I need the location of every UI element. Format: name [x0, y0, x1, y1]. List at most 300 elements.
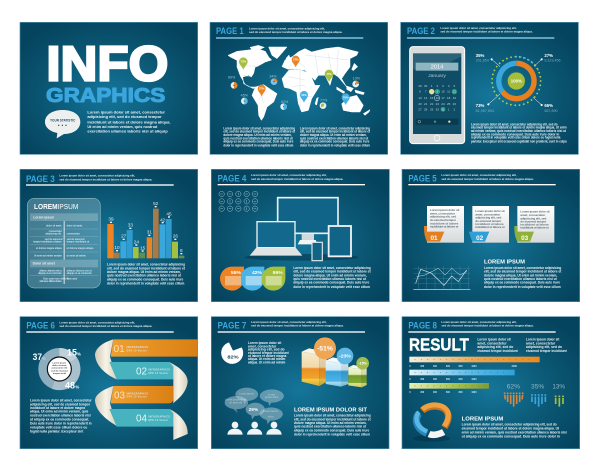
text block: [294, 414, 371, 436]
bar chart: 8: [180, 248, 183, 253]
donut chart: dolor sit amet: [52, 364, 67, 367]
table card: et dolore magna aliqua: [36, 247, 62, 250]
text column 1: amet, consectetur: [477, 341, 507, 345]
table card: aliquip ex ea commodo: [67, 273, 92, 275]
speech bubbles: Lorem: [268, 394, 275, 396]
card 01: [424, 206, 464, 243]
header text: Lorem ipsum dolor sit amet, consectetur adipisicing elit,: [440, 26, 517, 30]
donut chart: Lorem ipsum: [53, 362, 66, 364]
bar: orange: 600: [446, 366, 451, 368]
text block: incididunt ut labore et dolore magna: [30, 406, 85, 410]
table card: et dolore magna aliqua: [67, 247, 94, 250]
phone with calendar: 30: [436, 107, 439, 111]
card 01: 01: [430, 235, 438, 242]
header text: [59, 174, 152, 181]
header text: Lorem ipsum dolor sit amet, consectetur adipisicing elit,: [249, 26, 325, 30]
text block: ut aliquip ex ea commodo consequat. Duis aute irure dolor in: [462, 434, 560, 438]
callout labels: 81,967,854: [476, 109, 494, 113]
card 03: incididunt ut labore: [520, 223, 549, 227]
text block: elit, sed do eiusmod tempor incididunt ut labore et: [294, 417, 371, 421]
text block: [248, 341, 289, 364]
donut chart 100%: [492, 57, 541, 105]
card 02: 02: [476, 235, 484, 242]
donut percentage labels: 13%: [353, 77, 361, 81]
speech bubbles: dolor: [268, 416, 274, 418]
card 02: amet, consectetur: [475, 212, 501, 216]
text column 1: eiusmod tempor incididunt: [477, 349, 518, 353]
text block: aliquip ex ea commodo consequat. Duis aute irure: [484, 281, 560, 285]
people pictogram: blue: [531, 394, 546, 407]
bar: orange: [409, 357, 540, 368]
text block: [471, 122, 567, 143]
text block: aliquip ex ea commodo consequat. Duis aute irure: [294, 428, 369, 432]
phone with calendar: 15: [430, 96, 434, 100]
card 01: do eiusmod tempor: [430, 218, 457, 222]
icon grid: [219, 191, 258, 211]
line chart: [413, 266, 470, 289]
text column right: elit, sed do eiusmod tempor incididunt ut labore et: [300, 130, 371, 134]
speech bubbles: Lorem ipsum: [263, 411, 278, 413]
device: tablet: [329, 226, 351, 256]
phone with calendar: 17: [441, 96, 445, 100]
card 02: incididunt ut labore: [475, 222, 504, 226]
donut chart: [43, 352, 76, 386]
device: laptop: [250, 222, 302, 256]
callout labels: 73%: [476, 103, 484, 108]
phone with calendar: 1: [448, 107, 450, 111]
header text: [59, 320, 152, 328]
bar chart: 52: [153, 201, 159, 206]
donut percentage labels: 62%: [281, 100, 289, 104]
callout labels: 201,854: [476, 59, 489, 63]
text column left: [223, 126, 296, 147]
bar: blue: [409, 370, 515, 381]
text column 2: amet, consectetur: [526, 341, 556, 345]
bar: green: [409, 383, 489, 394]
ribbon 01: EPS 10 Vector: [127, 349, 147, 352]
text column right: Lorem ipsum dolor sit amet, consectetur adipisicing: [300, 126, 370, 130]
text block: aliquip ex ea commodo consequat. Duis aute irure: [107, 277, 183, 281]
speech bubbles: sit amet elit: [229, 402, 242, 405]
text block: [462, 423, 567, 438]
table card: sed do eiusmod: [67, 239, 85, 241]
header text: sed do eiusmod tempor incididunt ut labore et dolore magna aliqua.: [251, 324, 344, 328]
text block: adipisicing elit, sed do: [248, 348, 285, 352]
donut labels: 48: [65, 381, 75, 391]
map pins: 37%: [259, 87, 265, 91]
donut chart: sed do eiusmod: [51, 370, 68, 372]
phone with calendar: 2: [453, 107, 455, 111]
table card: consectetur: [49, 230, 62, 233]
phone with calendar: 7: [425, 90, 427, 94]
heading: page 8: PAGE 8: [408, 320, 437, 330]
phone with calendar: 5: [453, 84, 455, 88]
text block: Lorem ipsum dolor sit amet, consectetur adipisicing: [107, 263, 185, 267]
bar: blue: 1000: [471, 379, 477, 381]
text block: dolore magna aliqua. Ut enim ad minim veniam,: [294, 421, 367, 425]
table card: Duis aute: [67, 277, 78, 280]
map borders: [237, 50, 348, 110]
card 02: incididunt ut labore et: [475, 225, 505, 229]
text column 2: [526, 338, 567, 353]
table card: sed do eiusmod: [45, 239, 63, 241]
table card: Duis aute irure dolor in: [43, 277, 69, 280]
text column right: quis nostrud exercitation ullamco laboris nisi ut: [300, 136, 369, 140]
map pins: 75%: [343, 95, 349, 99]
card 01: amet, consectetur: [430, 211, 456, 215]
header text: [441, 173, 534, 181]
people icons: [227, 422, 282, 435]
text block: voluptate velit esse cillum dolore eu: [30, 425, 87, 429]
callout labels: [476, 53, 561, 113]
ribbon 04: EPS 10 Vector: [148, 419, 168, 422]
card 03: incididunt ut labore et: [520, 226, 549, 230]
header text: Lorem ipsum dolor sit amet, consectetur adipisicing elit,: [441, 173, 517, 177]
phone with calendar: 27: [418, 107, 422, 111]
text block: Lorem ipsum dolor sit amet, consectetur adipisicing: [484, 266, 561, 270]
bar chart: 15: [140, 245, 146, 250]
cover text block: adipisicing elit, sed do eiusmod tempor: [87, 115, 162, 119]
table card: Ut enim ad minim veniam: [34, 255, 62, 258]
phone with calendar: 8: [431, 90, 433, 94]
donut labels: %: [42, 356, 46, 361]
panel: page 1 world map: [210, 22, 388, 154]
phone with calendar: [410, 47, 465, 144]
card 03: [514, 206, 554, 243]
text block: aliqua. Ut enim ad minim: [248, 360, 285, 364]
phone with calendar: 11: [447, 90, 451, 94]
text column 1: Lorem ipsum dolor sit: [477, 338, 511, 342]
bar chart: 26: [173, 233, 178, 238]
text block: amet, consectetur: [248, 344, 277, 348]
ribbon 02: EPS 10 Vector: [148, 372, 168, 375]
table card: dolor sit amet,: [46, 225, 62, 228]
percentages: 13%: [552, 384, 565, 391]
phone with calendar: 9: [436, 90, 438, 94]
text block: elit, sed do eiusmod tempor incididunt ut labore et: [293, 270, 371, 274]
title: INFO: INFO: [46, 36, 168, 91]
title: RESULT: RESULT: [409, 335, 469, 355]
text column left: dolor in reprehenderit in voluptate velit esse cillum: [223, 143, 293, 147]
bar: blue: 0: [409, 379, 411, 381]
text block: dolor in reprehenderit in voluptate velit esse cillum: [293, 285, 370, 289]
subtitle: GRAPHICS: GRAPHICS: [46, 85, 165, 107]
table card: [27, 198, 100, 288]
text block: dolore magna aliqua. Ut enim ad minim veniam,: [484, 273, 557, 277]
card 03: Lorem ipsum dolor sit: [520, 210, 550, 214]
bar chart: 45: [166, 211, 172, 216]
text block: Lorem ipsum dolor sit amet, consectetur adipisicing elit, sed do: [471, 122, 558, 126]
ribbon 03: INFOGRAPHICS: [127, 392, 148, 395]
text block: eiusmod tempor incididunt ut labore et dolore magna aliqua. Ut enim: [471, 126, 567, 130]
text block: enim ad minim veniam, quis nostrud exercitation ullamco laboris nisi: [462, 430, 567, 434]
text column right: dolore magna aliqua. Ut enim ad minim veniam,: [300, 133, 367, 137]
header text: sed do eiusmod tempor incididunt ut labore et dolore magna aliqua.: [251, 177, 343, 181]
ribbon 02: [109, 362, 188, 403]
map pins: [239, 56, 350, 105]
panel: cover: [20, 22, 198, 154]
percentages: [507, 384, 565, 391]
header text: [249, 26, 342, 34]
text block: elit, sed do eiusmod tempor incididunt ut labore et: [107, 266, 186, 270]
bar: orange: 400: [433, 365, 438, 368]
percentage drops: [220, 267, 285, 291]
donut percentage labels: 69%: [228, 76, 236, 80]
donut chart: consectetur elit: [51, 367, 68, 370]
text block: aliqua. Ut enim ad minim veniam, quis: [30, 410, 88, 414]
cover text block: incididunt ut labore et dolore magna aliqua.: [87, 120, 171, 124]
speech bubbles: ipsum dolor: [265, 397, 278, 399]
bar: green: 1000: [471, 392, 477, 394]
text block: Lorem ipsum dolor sit: [248, 341, 282, 345]
text column 2: Lorem ipsum dolor sit: [526, 338, 560, 342]
phone with calendar: 1: [431, 84, 433, 88]
map pins: 73%: [241, 60, 247, 64]
text block: ut labore et dolore magna: [248, 354, 286, 358]
table card: ut enim ad minim: [67, 255, 86, 258]
percentages: 62%: [507, 384, 520, 391]
text block: fugiat nulla pariatur. Excepteur sint: [30, 429, 84, 433]
bar chart: 24: [134, 239, 139, 244]
phone with calendar: 22: [430, 102, 434, 106]
percentage drops: 55%: [273, 270, 283, 276]
phone with calendar: 10: [441, 90, 445, 94]
text block: dolore magna aliqua. Ut enim ad minim veniam,: [107, 270, 181, 274]
percentage circles: -15%: [358, 362, 368, 366]
donut chart: tempor incid: [53, 372, 66, 375]
heading: page 3: PAGE 3: [26, 174, 55, 184]
map pins: 52%: [301, 93, 307, 97]
phone with calendar: 26: [453, 102, 456, 106]
header text: sed do eiusmod tempor incididunt ut labore et dolore magna aliqua.: [441, 324, 534, 328]
table card: LOREMIPSUM: [34, 202, 78, 211]
device: phone: [312, 242, 322, 261]
world map: [228, 45, 370, 120]
text block: [293, 266, 371, 289]
device: monitor: [278, 198, 338, 244]
phone with calendar: 29: [418, 84, 422, 88]
bar chart: 10: [114, 245, 120, 250]
cover text block: Ut enim ad minim veniam, quis nostrud: [87, 125, 157, 129]
bar: blue: 200: [420, 379, 425, 381]
text column left: dolore magna aliqua. Ut enim ad minim veniam,: [223, 133, 292, 137]
phone with calendar: 2: [436, 84, 438, 88]
heading: lorem ipsum: LOREM IPSUM: [462, 416, 504, 422]
heading: page 5: PAGE 5: [408, 173, 437, 183]
percentage circles: -23%: [339, 354, 351, 360]
ribbon 02: INFOGRAPHICS: [148, 369, 170, 372]
table card: Lorem Ipsum: [33, 215, 54, 219]
panel: page 6 donut and ribbons: [20, 317, 198, 449]
phone with calendar: 20: [418, 102, 422, 106]
bar: green: 800: [459, 392, 463, 394]
card 02: [469, 206, 509, 243]
phone with calendar: 31: [441, 107, 445, 111]
text block: dolor in reprehenderit in voluptate velit esse cillum: [107, 281, 184, 285]
bar: orange: 2000: [512, 366, 518, 368]
bar: green: 400: [433, 391, 438, 394]
phone with calendar: 28: [424, 107, 428, 111]
bar: green: 200: [420, 392, 425, 394]
phone with calendar: 6: [419, 90, 421, 94]
ribbon 01: 01: [114, 344, 125, 355]
phone with calendar: 24: [441, 102, 445, 106]
3d box: blue: [326, 357, 348, 387]
heading: page 1: PAGE 1: [216, 26, 244, 36]
text block: Duis aute irure dolor in reprehenderit in: [30, 421, 92, 425]
header text: sed do eiusmod tempor incididunt ut labore et dolore magna aliqua.: [440, 30, 533, 34]
table card: consectetur: [67, 233, 80, 236]
text block: nostrud exercitation ullamco laboris nisi: [30, 413, 91, 417]
text block: elit, sed do eiusmod tempor incididunt ut labore et: [484, 270, 562, 274]
header text: Lorem ipsum dolor sit amet, consectetur adipisicing elit,: [59, 174, 135, 178]
card 02: adipisicing elit, sed: [475, 216, 502, 220]
panel: page 7 boxes and speech bubbles: [211, 317, 389, 449]
text block: dolore magna aliqua. Ut enim ad minim veniam,: [293, 273, 367, 277]
phone with calendar: 30: [424, 84, 428, 88]
text block: ad minim veniam, quis nostrud exercitation ullamco laboris nisi ut: [471, 129, 567, 133]
bar chart: 27: [121, 234, 127, 239]
text column left: elit, sed do eiusmod tempor incididunt ut labore et: [223, 130, 296, 134]
header text: Lorem ipsum dolor sit amet, consectetur adipisicing elit,: [441, 320, 517, 324]
text column left: Lorem ipsum dolor sit amet, consectetur adipisicing: [223, 126, 295, 130]
pie 82%: [221, 342, 243, 364]
map pins: 27%: [293, 58, 299, 62]
table card: ullamco laboris nisi ut: [39, 269, 62, 272]
callout leaders: [487, 58, 542, 106]
donut percentage labels: 77%: [320, 98, 328, 102]
text block: quis nostrud exercitation ullamco laboris nisi ut: [484, 277, 557, 281]
ribbon 04: [109, 409, 188, 440]
phone with calendar: 4: [448, 84, 450, 88]
text column right: [300, 126, 371, 147]
text block: adipisicing elit, sed do eiusmod tempor: [30, 402, 91, 406]
text block: [107, 263, 186, 285]
donut chart 100%: 100%: [511, 79, 522, 84]
cover text block: exercitation ullamco laboris nisi ut aliquip: [87, 130, 168, 134]
donut labels: %: [75, 385, 79, 390]
phone with calendar: 19: [453, 96, 456, 100]
table card: aliquip ex ea commodo: [38, 273, 62, 275]
bar chart: 42: [160, 217, 166, 222]
header text: [251, 320, 344, 328]
text block: [484, 266, 562, 289]
bar: green: 600: [446, 392, 451, 394]
table card: adipiscing elit,: [45, 233, 62, 236]
bar chart: 33: [128, 223, 133, 228]
text block: quis nostrud exercitation ullamco laboris nisi ut: [107, 274, 182, 278]
table card: dolor sit amet,: [67, 225, 83, 228]
panel: page 5 cards and line chart: [402, 169, 580, 302]
shadow under devices: [245, 254, 358, 261]
text block: aliquip ex ea commodo consequat. Duis aute irure dolor in: [471, 132, 559, 136]
bar: orange: 1000: [471, 366, 477, 368]
heading: page 6: PAGE 6: [26, 320, 55, 330]
text column left: quis nostrud exercitation ullamco laboris nisi ut: [223, 136, 293, 140]
header text: sed do eiusmod tempor incididunt ut labore et dolore magna aliqua.: [249, 30, 342, 34]
speech bubble badge: [45, 110, 80, 138]
card 01: adipisicing elit, sed: [430, 215, 456, 219]
cover text block: [87, 111, 171, 134]
text block: Lorem ipsum dolor sit amet, consectetur adipisicing elit, sed do: [462, 423, 557, 427]
header text: sed do eiusmod tempor incididunt ut labore et dolore magna aliqua.: [59, 177, 152, 181]
phone with calendar: 2014: [431, 65, 443, 71]
phone with calendar: 23: [436, 102, 439, 106]
phone with calendar: 14: [424, 96, 428, 100]
text block: Lorem ipsum dolor sit amet, consectetur: [30, 399, 92, 403]
heading: lorem ipsum: LOREM IPSUM: [484, 260, 525, 266]
donut labels: 15: [67, 347, 77, 357]
phone with calendar: 21: [424, 102, 428, 106]
text block: dolor in reprehenderit in voluptate velit esse cillum: [484, 285, 561, 289]
text block: reprehenderit in voluptate velit esse cillum dolore eu fugiat nulla: [471, 136, 560, 140]
phone with calendar: 3: [442, 84, 444, 88]
table card: velit esse cillum dolore: [39, 280, 62, 283]
panel: page 4 devices: [211, 169, 389, 302]
header text: sed do eiusmod tempor incididunt ut labore et dolore magna aliqua.: [59, 324, 152, 328]
text block: aliquip ex ea commodo consequat. Duis aute irure: [293, 281, 369, 285]
phone with calendar: 13: [418, 96, 422, 100]
header text: Lorem ipsum dolor sit amet, consectetur adipisicing elit,: [59, 320, 135, 324]
header text: Lorem ipsum dolor sit amet, consectetur adipisicing elit,: [251, 173, 327, 177]
phone with calendar: January: [428, 73, 446, 79]
phone with calendar: 29: [430, 107, 434, 111]
text column right: dolor in reprehenderit in voluptate velit esse cillum: [300, 143, 370, 147]
phone with calendar: 16: [436, 96, 439, 100]
text block: pariatur. Excepteur sint occaecat cupidatat non proident, sunt in culpa: [471, 139, 567, 143]
card 02: Lorem ipsum dolor sit: [475, 209, 505, 213]
percentages: 35%: [531, 384, 544, 391]
text block: quis nostrud exercitation ullamco laboris nisi ut: [293, 277, 367, 281]
text block: aliqua. Ut enim ad minim: [248, 357, 285, 361]
phone with calendar: 18: [447, 96, 451, 100]
callout labels: 35%: [476, 53, 484, 58]
card 01: Lorem ipsum dolor sit: [430, 208, 459, 212]
header text: [251, 173, 343, 181]
text block: [30, 399, 92, 433]
ribbon 03: [95, 386, 173, 426]
people pictogram: green: [555, 395, 564, 407]
speech bubble badge: YOUR STATISTIC: [50, 119, 76, 123]
card 01: incididunt ut labore: [430, 221, 459, 225]
speech bubbles: [225, 388, 284, 424]
text block: eiusmod tempor incididunt: [248, 351, 289, 355]
card 03: 03: [521, 235, 529, 242]
percentage drops: 55%: [231, 270, 242, 276]
card 02: do eiusmod tempor: [475, 219, 502, 223]
text column 1: [477, 338, 518, 353]
text column left: aliquip ex ea commodo consequat. Duis aute irure: [223, 140, 293, 144]
text column 2: eiusmod tempor incididunt: [526, 349, 567, 353]
text block: quis nostrud exercitation ullamco laboris nisi ut: [294, 425, 367, 429]
ribbon 04: INFOGRAPHICS: [148, 416, 170, 419]
callout labels: 65%: [544, 103, 553, 108]
3d box: orange: [302, 348, 327, 386]
panel: page 8 result: [402, 317, 580, 449]
heading: lorem ipsum dolor sit: LOREM IPSUM DOLOR SIT: [294, 407, 368, 413]
panel: page 2 phone and donut: [401, 22, 578, 154]
panel: page 3 table and bars: [20, 169, 198, 302]
bar: orange: 200: [420, 366, 425, 368]
3d box: green: [348, 365, 367, 387]
donut percentage labels: 45%: [241, 94, 249, 98]
table card: ullamco laboris nisi ut: [67, 269, 92, 272]
header text: [441, 320, 534, 328]
text block: dolor in reprehenderit in voluptate velit esse cillum: [294, 432, 370, 436]
bar: blue: 400: [433, 378, 438, 381]
table card: Dolor sit amet: [33, 262, 56, 266]
heading: page 7: PAGE 7: [218, 320, 246, 330]
